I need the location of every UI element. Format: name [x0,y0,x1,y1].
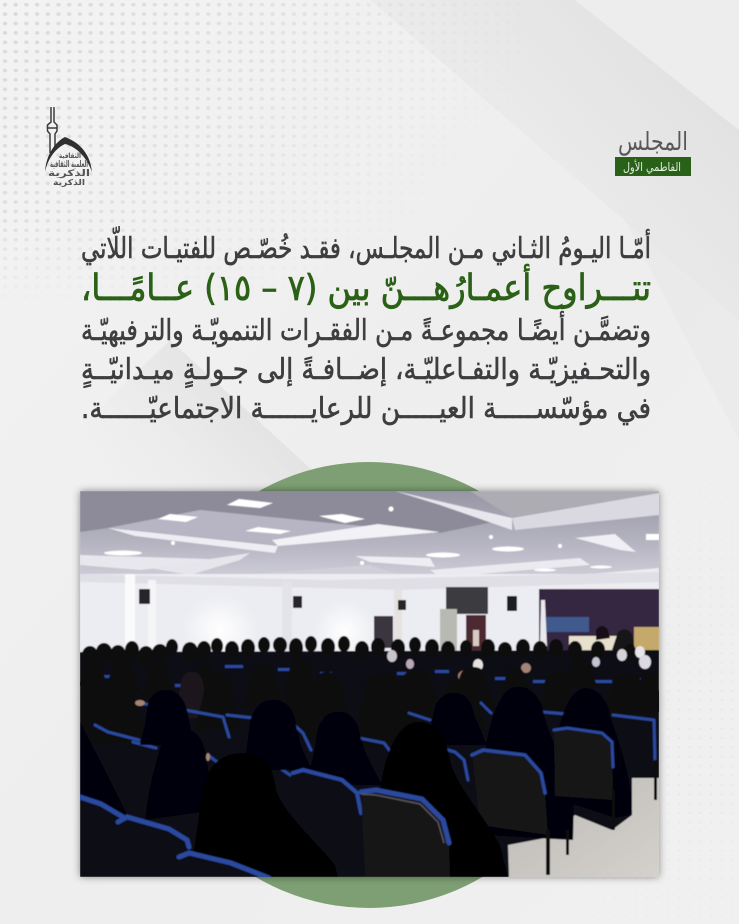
calligraphy: الذكرية [53,178,85,187]
photo floor and seating base [80,650,659,877]
chair tops mid rows [95,702,655,780]
body text: والتحـفيزيّـة والتفـاعليّـة، إضــافـةً إلى جـولـةٍ ميـدانيّــةٍ [81,352,651,388]
calligraphy: الذكرية [48,169,90,179]
photo: hall audience [79,491,665,878]
body text [81,227,651,426]
audience back rows [82,636,651,682]
calligraphy: الثقافية [59,152,81,160]
chairs front rows [80,728,613,877]
dot pattern: top left [2,3,402,270]
ceiling lights [227,499,273,508]
green circle behind photo [146,462,592,908]
icon: dome [45,137,92,172]
logo [45,107,92,187]
banners [374,616,393,648]
chairs foreground [179,760,657,878]
screen [446,587,488,614]
calligraphy [48,152,90,187]
back-row seat strips [103,664,642,688]
speakers [139,589,150,604]
door [440,609,457,651]
dot pattern: bottom right [668,597,734,832]
photo ceiling [75,486,664,578]
event subtitle badge [615,157,691,176]
stage wall [539,589,659,651]
body text: في مؤسّســـــة العيـــــن للرعايــــــة الاجتماعيّــــــة. [81,391,651,426]
faces [134,699,211,762]
icon: minaret [48,107,57,153]
audience foreground [190,722,508,877]
event subtitle badge: الفاطمي الأول [623,159,681,175]
highlighted text line: تتـــراوح أعمـارُهـــنّ بين (٧ – ١٥) عــامًـــا، [81,264,651,309]
calligraphy: العلمية الثقافية [50,160,88,170]
audience mid rows [79,653,665,748]
photo wall [75,572,664,654]
event title: المجلس [618,127,688,156]
audience front rows [80,687,632,840]
